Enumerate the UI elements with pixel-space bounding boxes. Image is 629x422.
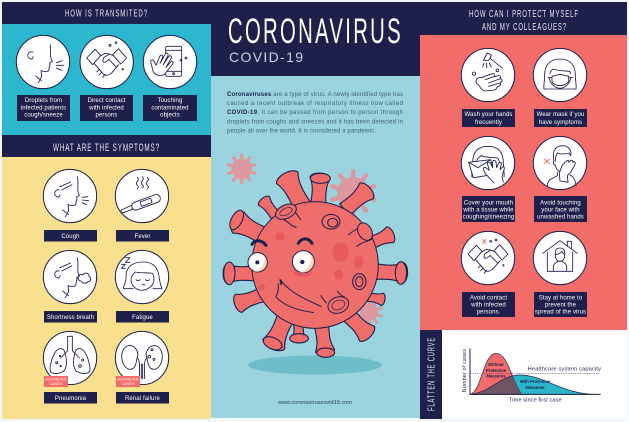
intro text: droplets from coughs and sneezes and it has been detected in bbox=[227, 120, 403, 126]
tag: advanced cases pneumonia: CASES bbox=[50, 382, 63, 386]
chart: flatten the curve: Healthcare system capacity bbox=[528, 366, 601, 372]
intro text: caused a recent outbreak of respiratory illness now called bbox=[227, 101, 403, 107]
label: touching objects: Touching bbox=[158, 98, 182, 104]
tag: advanced cases pneumonia: ADVANCED bbox=[46, 378, 67, 382]
label: cough: Cough bbox=[61, 234, 80, 240]
label: shortness breath: Shortness breath bbox=[47, 315, 94, 321]
label: shortness breath bbox=[44, 311, 97, 322]
heading: how is transmitted: HOW IS TRANSMITED? bbox=[65, 8, 148, 20]
label: avoid touching: your face with bbox=[541, 208, 580, 214]
chart: flatten the curve bbox=[462, 348, 601, 404]
label: droplets bbox=[17, 95, 70, 121]
label: fatigue bbox=[116, 311, 169, 322]
label: wash hands: Wash your hands bbox=[465, 112, 512, 118]
chart: flatten the curve: Protective bbox=[486, 368, 507, 373]
left eye bbox=[248, 253, 267, 272]
label: avoid contact: persons. bbox=[477, 310, 501, 316]
ground shadow bbox=[248, 356, 382, 374]
label: touching objects: contaminated bbox=[151, 106, 189, 112]
panel: flatten the curve bbox=[420, 330, 627, 419]
label: avoid touching: unwashed hands bbox=[537, 214, 584, 220]
tag: advanced cases pneumonia bbox=[44, 376, 68, 387]
label: renal failure bbox=[116, 392, 169, 404]
label: stay at home: prevent the bbox=[545, 302, 577, 308]
chart: flatten the curve: Measures bbox=[486, 374, 506, 379]
website url: www.coronaviruscovid19.com bbox=[277, 400, 352, 406]
tag: advanced cases renal: CASES bbox=[122, 382, 135, 386]
label: direct contact: with infected bbox=[88, 106, 124, 112]
label: avoid contact: Avoid contact bbox=[470, 296, 507, 302]
icon: cough bbox=[43, 169, 97, 223]
icon: fever bbox=[115, 169, 169, 223]
label: fatigue: Fatigue bbox=[132, 315, 153, 321]
label: droplets: cough/sneeze bbox=[24, 112, 63, 118]
icon: fatigue bbox=[115, 250, 169, 304]
subtitle: COVID-19 bbox=[229, 49, 303, 65]
icon: pneumonia bbox=[43, 331, 97, 385]
icon: cover mouth bbox=[461, 136, 515, 190]
label: stay at home: Stay at home to bbox=[539, 296, 583, 302]
chart: flatten the curve: Time since first case bbox=[509, 398, 562, 404]
label: droplets: Droplets from bbox=[25, 98, 62, 104]
heading: symptoms: WHAT ARE THE SYMPTOMS? bbox=[53, 142, 160, 154]
label: pneumonia bbox=[44, 392, 97, 404]
label: direct contact bbox=[80, 95, 133, 121]
label: wash hands: frecuently bbox=[475, 120, 502, 126]
label: avoid touching bbox=[534, 196, 587, 222]
panel: protect yourself bbox=[420, 2, 627, 330]
panel: how is transmitted bbox=[2, 2, 211, 135]
icon: stay at home bbox=[533, 231, 587, 285]
panel: centre overview bbox=[211, 2, 420, 418]
label: touching objects: objects bbox=[160, 112, 180, 118]
intro text: people all over the world. It is considered a pandemic. bbox=[227, 128, 376, 134]
chart: flatten the curve: Without bbox=[488, 362, 504, 367]
chart: flatten the curve: Measures bbox=[525, 385, 545, 390]
label: wear mask bbox=[534, 109, 587, 127]
label: avoid touching: Avoid touching bbox=[540, 200, 581, 206]
icon: wash hands bbox=[461, 48, 515, 102]
label: wear mask: Wear mask if you bbox=[537, 112, 584, 118]
label: fever bbox=[116, 230, 169, 242]
label: cough bbox=[44, 230, 97, 242]
title: CORONAVIRUS bbox=[228, 12, 403, 51]
background virus lower bbox=[357, 299, 381, 325]
label: cover mouth: with a tissue while bbox=[462, 208, 514, 214]
label: direct contact: persons bbox=[95, 112, 118, 118]
icon: handshake bbox=[80, 35, 133, 89]
right eye bbox=[292, 251, 314, 273]
label: avoid contact bbox=[462, 292, 515, 317]
label: wash hands bbox=[462, 109, 515, 127]
label: avoid contact: with infected bbox=[470, 302, 506, 308]
label: cover mouth: Cover your mouth bbox=[464, 200, 513, 206]
intro text: COVID-19. It can be passed from person to person through bbox=[227, 110, 403, 116]
icon: avoid touching face bbox=[533, 136, 587, 190]
icon: shortness of breath bbox=[43, 250, 97, 304]
label: cover mouth: coughing/sneezing bbox=[463, 214, 514, 220]
label: touching objects bbox=[143, 95, 197, 121]
label: wear mask: have symptoms bbox=[539, 120, 582, 126]
heading: protect yourself: AND MY COLLEAGUES? bbox=[482, 22, 567, 33]
tag: advanced cases renal bbox=[116, 376, 140, 387]
tag: advanced cases renal: ADVANCED bbox=[118, 378, 139, 382]
icon: renal failure bbox=[115, 331, 169, 385]
icon: droplets bbox=[16, 35, 70, 89]
chart: flatten the curve: Number of cases bbox=[462, 349, 468, 392]
icon: avoid contact bbox=[461, 231, 515, 285]
virus character bbox=[223, 167, 408, 357]
label: stay at home: spread of the virus bbox=[535, 310, 586, 316]
label: cover mouth bbox=[462, 196, 515, 222]
icon: phone and hand bbox=[143, 35, 197, 89]
intro text: Coronaviruses are a type of virus. A newly identified type has bbox=[227, 92, 403, 98]
label: fever: Fever bbox=[135, 234, 150, 240]
panel: symptoms bbox=[2, 135, 211, 419]
label: stay at home bbox=[534, 292, 587, 317]
label: pneumonia: Pneumonia bbox=[55, 396, 87, 402]
icon: wear mask bbox=[533, 48, 587, 102]
intro text bbox=[227, 92, 403, 134]
heading: protect yourself bbox=[469, 9, 579, 33]
background virus small bbox=[228, 155, 255, 183]
label: direct contact: Direct contact bbox=[87, 98, 126, 104]
background virus large bbox=[332, 171, 374, 215]
label: droplets: infected patients bbox=[21, 106, 66, 112]
label: renal failure: Renal failure bbox=[125, 396, 161, 402]
heading: flatten the curve: FLATTEN THE CURVE bbox=[426, 337, 438, 411]
chart: flatten the curve: With Protective bbox=[520, 379, 551, 384]
